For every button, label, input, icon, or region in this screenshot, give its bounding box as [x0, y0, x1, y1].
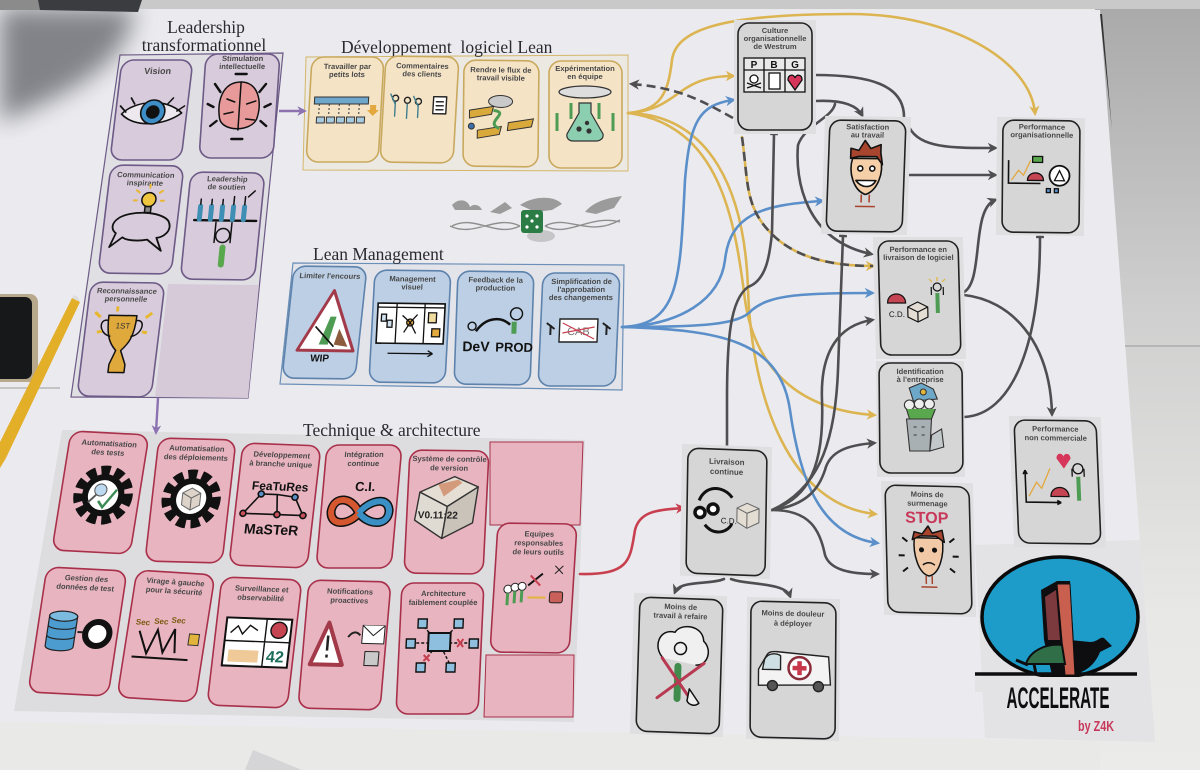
card: Moins de surmenage — [881, 481, 976, 617]
card: Vision — [110, 60, 193, 160]
panel backing: leadership — [71, 53, 283, 398]
card: Management visuel: Management — [389, 274, 436, 284]
icon: stressed face with stop: STOP — [905, 509, 949, 528]
dashed reciprocal line to software delivery performance — [742, 137, 873, 266]
icon: database to gear — [44, 610, 112, 653]
card: Système de contrôle de version — [404, 450, 489, 574]
icon: growth chart, gauge and network — [1008, 156, 1070, 193]
icon: shift-left security: Sec — [171, 616, 187, 626]
icon: features and master branches — [237, 478, 310, 539]
card: Equipes responsables de leurs outils: responsables — [514, 538, 564, 548]
card: Limiter l'encours: Limiter l'encours — [299, 271, 361, 281]
icon: visual board — [375, 303, 445, 357]
card: Identification à l'entreprise: à l'entreprise — [897, 375, 944, 384]
card: Communication inspirante: Communication — [117, 170, 175, 180]
paper scrap at bottom — [245, 750, 302, 770]
card: Notifications proactives: Notifications — [327, 586, 373, 597]
card: Notifications proactives — [298, 580, 391, 710]
icon: ambulance — [758, 651, 831, 692]
card: Performance en livraison de logiciel — [873, 237, 966, 359]
icon: warning and mail — [310, 622, 385, 666]
card: Expérimentation en équipe — [549, 61, 622, 168]
card: Développement à branche unique — [229, 443, 321, 568]
heading: leadership: transformationnel — [142, 35, 266, 55]
card: Culture organisationnelle de Westrum: de Westrum — [753, 42, 797, 51]
card: Stimulation intellectuelle: intellectuelle — [219, 62, 265, 71]
logo tower — [1041, 581, 1076, 675]
card: Surveillance et observabilité: observabilité — [237, 593, 285, 603]
card: Architecture faiblement couplée: Architecture — [421, 589, 466, 598]
card: Automatisation des tests: Automatisation — [81, 438, 138, 449]
icon: company building — [904, 383, 944, 451]
logo hare silhouette — [1068, 638, 1112, 674]
card: Travailler par petits lots: petits lots — [329, 70, 365, 79]
card: Reconnaissance personnelle: Reconnaissance — [96, 286, 157, 296]
card: Satisfaction au travail — [821, 116, 911, 235]
card: Automatisation des tests — [52, 431, 149, 554]
card: Stimulation intellectuelle: Stimulation — [222, 54, 264, 63]
icon: chart, heart and person — [1022, 453, 1085, 505]
card: Moins de surmenage: surmenage — [907, 499, 948, 508]
icon: Westrum table: B — [770, 60, 778, 71]
card: Moins de douleur à déployer: Moins de douleur — [761, 608, 824, 619]
card: Automatisation des déploiements: des déploiements — [163, 452, 228, 463]
card: Développement à branche unique: Développement — [253, 449, 311, 461]
card: Automatisation des déploiements — [145, 438, 236, 563]
icon: WIP warning triangle: WIP — [310, 353, 330, 365]
card: Management visuel: visuel — [401, 282, 423, 292]
blue arrows from change approval — [622, 100, 877, 543]
panel backing: lean development — [303, 55, 628, 171]
icon: customers and document — [389, 94, 447, 119]
card: Stimulation intellectuelle — [199, 54, 280, 158]
card: Limiter l'encours — [282, 266, 367, 379]
icon: flask with team — [557, 86, 613, 141]
heading: lean management: Lean Management — [313, 244, 444, 264]
card: Feedback de la production: production — [475, 283, 516, 293]
icon: gear with magnifier and check — [74, 469, 132, 521]
card: Equipes responsables de leurs outils: de leurs outils — [512, 547, 564, 557]
card: Gestion des données de test — [28, 567, 127, 696]
icon: lightbulb over speech bubble — [109, 184, 175, 251]
card: Automatisation des déploiements: Automatisation — [169, 443, 225, 454]
card: Performance organisationnelle: organisationnelle — [1010, 130, 1073, 140]
card: Commentaires des clients: Commentaires — [396, 61, 449, 71]
card: Performance organisationnelle — [996, 117, 1085, 236]
card: Expérimentation en équipe: Expérimentation — [555, 64, 615, 73]
card: Moins de douleur à déployer: à déployer — [774, 619, 812, 628]
icon: shift-left security — [130, 613, 202, 661]
yellow arrows from experimentation — [628, 14, 1035, 514]
icon: versioned parcel: V0.11:22 — [418, 510, 459, 522]
phone on the desk — [0, 294, 38, 382]
icon: shift-left security: Sec — [135, 617, 151, 627]
card: Surveillance et observabilité — [207, 577, 302, 708]
card: Travailler par petits lots: Travailler par — [324, 62, 371, 71]
logo byline: by Z4K — [1078, 718, 1114, 735]
card: Simplification de l'approbation des changements: Simplification de — [551, 277, 612, 286]
card: Automatisation des tests: des tests — [91, 447, 125, 458]
card: Communication inspirante — [98, 165, 184, 274]
card: Système de contrôle de version: de version — [430, 463, 469, 473]
dark arrows between capabilities and outcomes — [675, 75, 1052, 596]
card: Rendre le flux de travail visible — [463, 60, 539, 167]
card: Travailler par petits lots — [306, 57, 384, 162]
card: Rendre le flux de travail visible: travail visible — [477, 73, 525, 83]
card: Livraison continue — [680, 444, 772, 579]
card: Feedback de la production: Feedback de la — [468, 275, 523, 285]
logo circle — [982, 557, 1138, 677]
card: Développement à branche unique: à branche unique — [249, 458, 313, 470]
card: Culture organisationnelle de Westrum — [734, 20, 816, 134]
icon: loosely coupled nodes — [405, 619, 479, 672]
card: Simplification de l'approbation des changements: l'approbation — [557, 285, 606, 294]
card: Simplification de l'approbation des changements — [538, 273, 620, 386]
icon: brain — [205, 74, 273, 139]
card: Notifications proactives: proactives — [330, 596, 369, 605]
heading: technical and architecture: Technique & architecture — [303, 420, 481, 440]
arrow: leadership to technical — [156, 398, 158, 432]
icon: happy face — [849, 140, 883, 207]
card: Commentaires des clients — [380, 56, 459, 163]
card: Virage à gauche pour la sécurité: Virage à gauche — [146, 576, 205, 588]
yellow pencil on the desk — [0, 295, 80, 468]
icon: trophy: 1ST — [115, 321, 131, 331]
card: Vision: Vision — [144, 66, 172, 76]
card: Virage à gauche pour la sécurité: pour la sécurité — [145, 585, 203, 597]
connectors — [156, 14, 1052, 596]
card: Culture organisationnelle de Westrum: Culture — [762, 26, 788, 35]
card: Performance en livraison de logiciel: livraison de logiciel — [883, 253, 954, 262]
icon: shift-left security: Sec — [154, 617, 170, 627]
icon: gear with parcel — [163, 473, 219, 525]
icon: visible workflow — [468, 95, 534, 139]
card: Architecture faiblement couplée: faiblement couplée — [409, 598, 478, 607]
panel backing: lean management — [280, 263, 624, 390]
card: Gestion des données de test: Gestion des — [64, 573, 109, 584]
card: Performance non commerciale: non commerciale — [1024, 433, 1087, 443]
icon: Westrum table: G — [791, 60, 799, 71]
dashed reciprocal arrow between culture and experimentation — [632, 84, 733, 118]
card: Culture organisationnelle de Westrum: organisationnelle — [744, 34, 806, 43]
icon: delivery gauge, parcel and person: C.D. — [889, 310, 905, 319]
card: Identification à l'entreprise — [876, 361, 965, 477]
panel backing: technical and architecture — [14, 430, 585, 722]
card: Satisfaction au travail: au travail — [851, 130, 884, 140]
card: Management visuel — [369, 270, 451, 383]
icon: DEV and PROD feedback — [462, 307, 534, 355]
card: Rendre le flux de travail visible: Rendre le flux de — [470, 65, 532, 75]
icon: features and master branches: FeaTuRes — [251, 479, 309, 495]
card: Identification à l'entreprise: Identification — [896, 367, 944, 376]
card: Moins de travail à refaire — [630, 593, 727, 737]
card: Performance non commerciale — [1009, 416, 1106, 548]
card: Leadership de soutien: de soutien — [207, 182, 246, 192]
icon: small batches — [313, 97, 380, 123]
card: Performance en livraison de logiciel: Performance en — [889, 245, 947, 254]
icon: leader supporting a team — [190, 190, 259, 265]
icon: crossed-out rework — [656, 626, 709, 706]
card: Intégration continue: Intégration — [344, 450, 384, 459]
card: Reconnaissance personnelle — [77, 282, 165, 397]
card: Intégration continue: continue — [347, 459, 380, 468]
card: Feedback de la production — [454, 271, 536, 385]
card: Leadership de soutien: Leadership — [207, 174, 248, 184]
card: Intégration continue — [316, 445, 402, 568]
heading: leadership: Leadership — [167, 17, 245, 37]
card: Moins de travail à refaire: Moins de — [664, 602, 697, 612]
card: Leadership de soutien — [180, 172, 265, 280]
card: Performance organisationnelle: Performance — [1019, 122, 1065, 132]
card: Performance non commerciale: Performance — [1032, 424, 1079, 434]
card: Moins de travail à refaire: travail à refaire — [653, 611, 708, 621]
card: Gestion des données de test: données de test — [56, 582, 115, 594]
card: Commentaires des clients: des clients — [402, 69, 442, 79]
card: Expérimentation en équipe: en équipe — [567, 72, 603, 81]
card: Simplification de l'approbation des changements: des changements — [549, 293, 613, 302]
icon: Westrum table: P — [751, 60, 758, 71]
card: Architecture faiblement couplée — [396, 583, 484, 714]
heading: lean development: Développement logiciel Lean — [341, 37, 553, 57]
card: Moins de douleur à déployer — [746, 597, 840, 741]
card: Livraison continue: Livraison — [709, 457, 745, 467]
card: Virage à gauche pour la sécurité — [117, 570, 215, 702]
logo tortoise — [1026, 645, 1065, 664]
icon: CI infinity loop: C.I. — [355, 479, 376, 494]
logo: Accelerate — [975, 557, 1140, 735]
card: Reconnaissance personnelle: personnelle — [104, 294, 148, 304]
card: Moins de surmenage: Moins de — [911, 490, 944, 499]
arrow: leadership to lean development — [279, 110, 304, 112]
icon: DEV and PROD feedback: DeV — [462, 338, 491, 354]
card: Equipes responsables de leurs outils — [490, 523, 577, 653]
card: Satisfaction au travail: Satisfaction — [846, 122, 889, 132]
icon: Westrum table — [744, 58, 805, 92]
logo ground — [975, 677, 1140, 692]
icon: monitoring dashboard: 42 — [265, 648, 285, 667]
icon: continuous delivery cycle: C.D. — [721, 516, 737, 526]
card: Livraison continue: continue — [710, 467, 744, 477]
card: Surveillance et observabilité: Surveillance et — [234, 584, 289, 594]
card: Equipes responsables de leurs outils: Equipes — [524, 529, 554, 539]
icon: DEV and PROD feedback: PROD — [495, 340, 533, 355]
decoration: animals, DNA and die — [450, 196, 622, 242]
card: Communication inspirante: inspirante — [126, 178, 164, 188]
icon: eye — [118, 98, 185, 124]
icon: team and tools — [503, 565, 564, 606]
icon: crossed-out CAB: CAB — [567, 326, 590, 338]
icon: features and master branches: MaSTeR — [243, 520, 299, 538]
card: Système de contrôle de version: Système de contrôle — [412, 454, 487, 464]
arrow: team tools to continuous delivery — [580, 508, 683, 574]
